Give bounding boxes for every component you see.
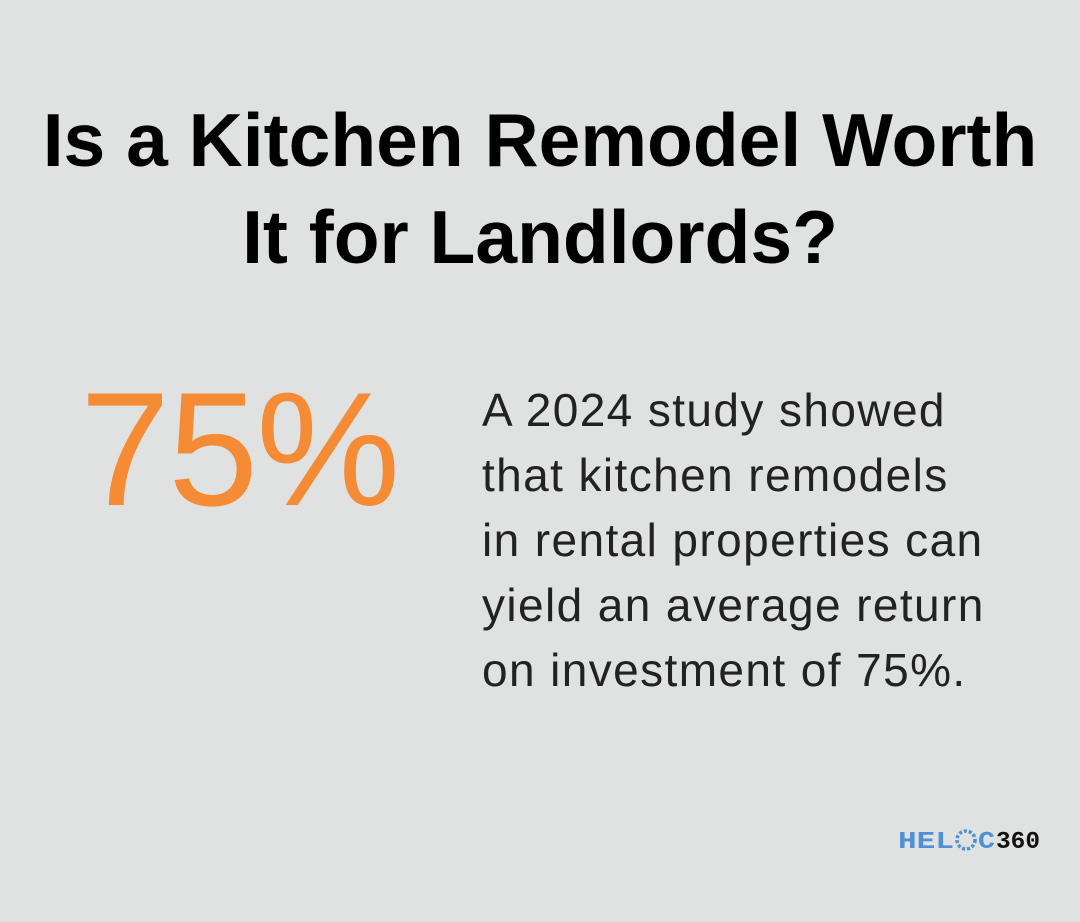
big stat: 75% [80,359,398,540]
description text: in rental properties can [482,514,984,566]
description text: A 2024 study showed [482,384,946,436]
title: It for Landlords? [242,195,838,279]
logo: HELOC360: HEL [898,829,954,856]
description text: on investment of 75%. [482,644,967,696]
description text: that kitchen remodels [482,449,949,501]
title: Is a Kitchen Remodel Worth [43,98,1037,182]
logo: HELOC360: C [978,829,995,856]
description text: yield an average return [482,579,985,631]
logo: HELOC360 [898,829,1040,856]
logo: HELOC360: 360 [996,829,1040,856]
description text [482,384,985,696]
title [43,98,1037,279]
